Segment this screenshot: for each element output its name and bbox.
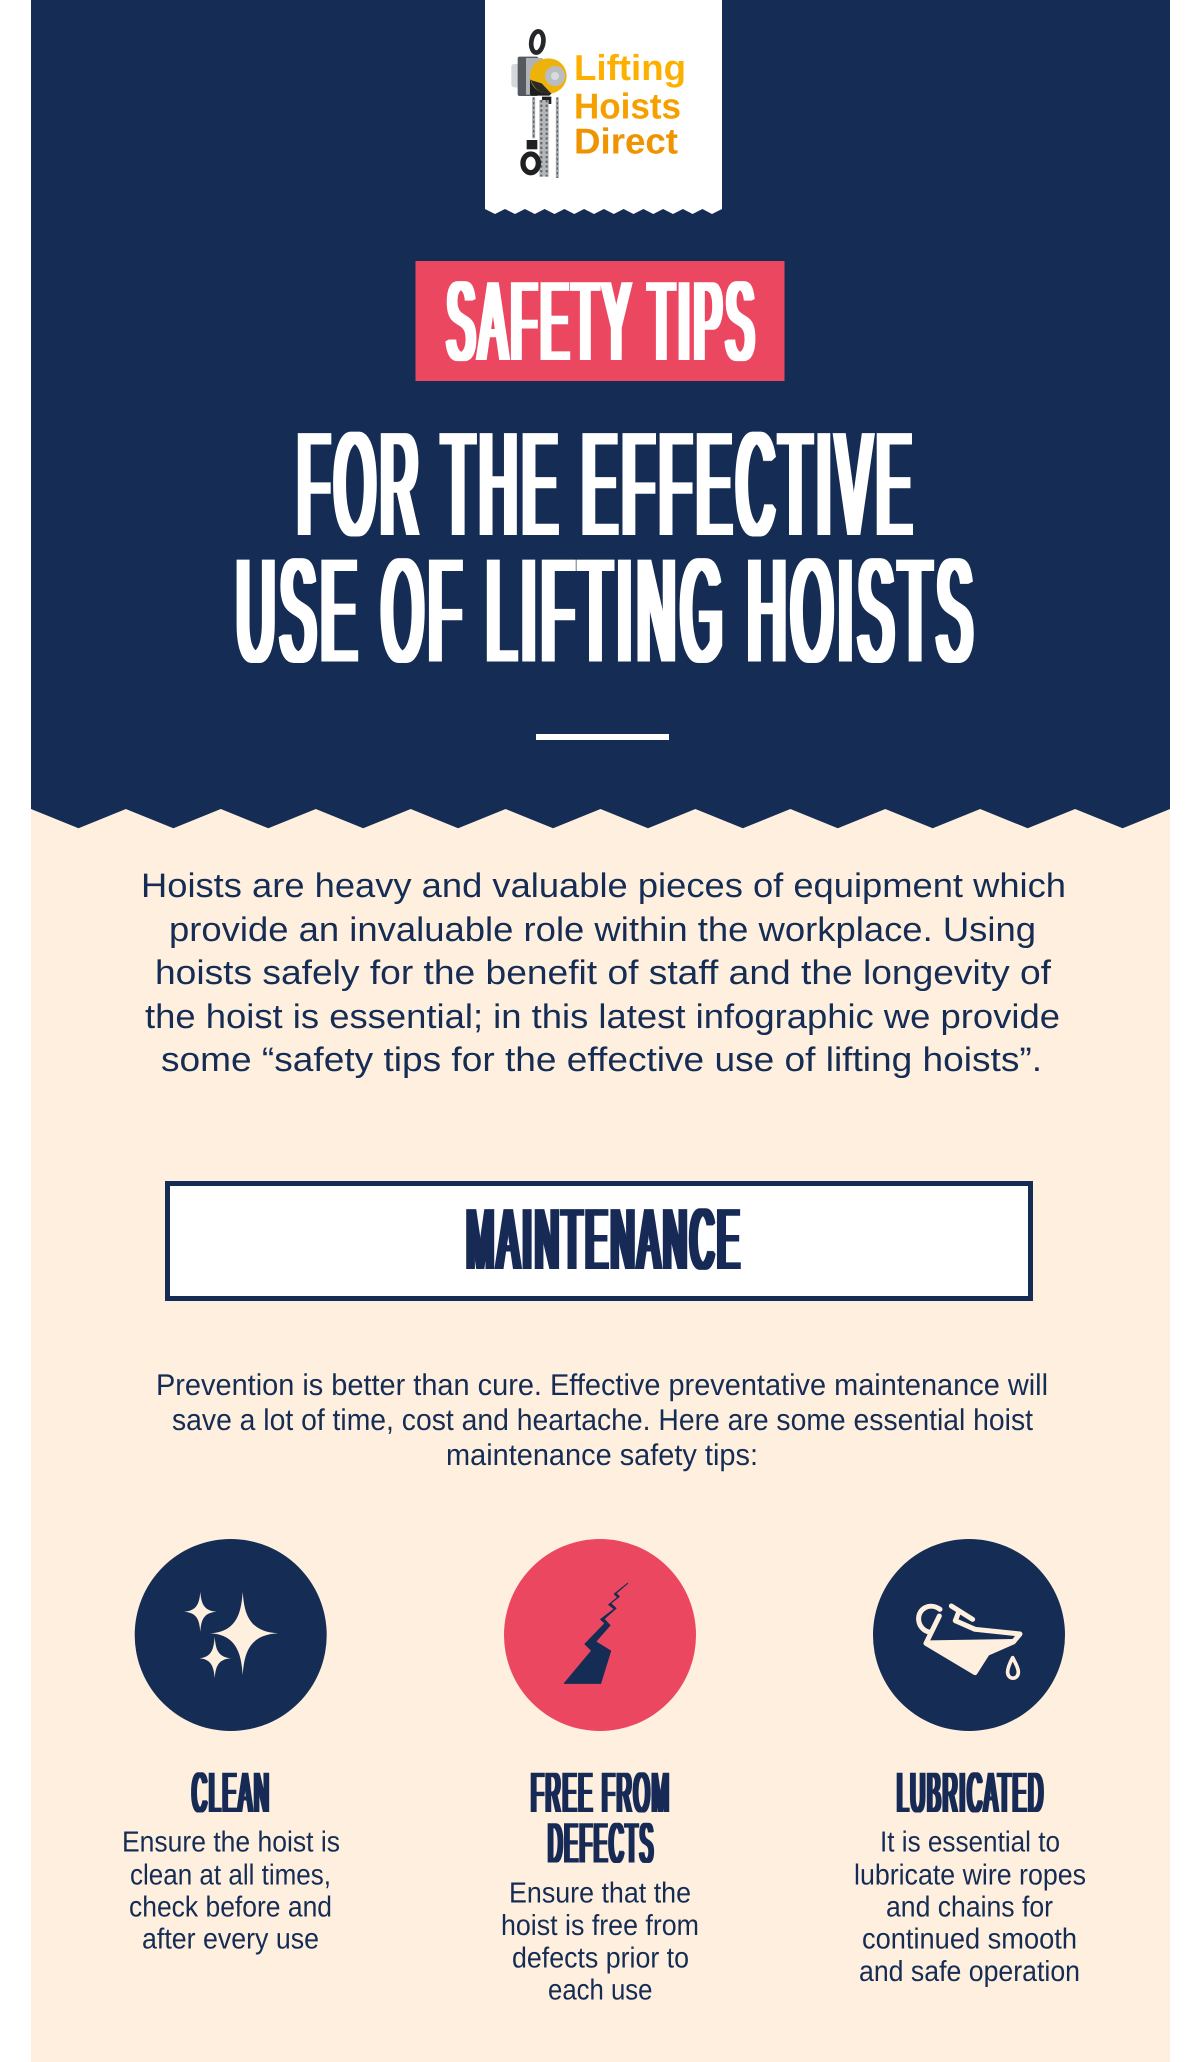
- safety tips badge: [416, 258, 784, 384]
- tip: free from defects: [501, 1539, 699, 2006]
- infographic: DEFECTS: [548, 1812, 655, 1876]
- heading: free from defects: [531, 1761, 671, 1876]
- description: clean: [122, 1827, 340, 1956]
- description: free from defects: each use: [548, 1974, 652, 2006]
- maintenance heading box: [168, 1184, 1030, 1298]
- description: lubricated: and safe operation: [859, 1956, 1080, 1988]
- logo tag background: [485, 0, 722, 214]
- logo wordmark: Hoists: [574, 86, 681, 126]
- description: clean: after every use: [142, 1924, 319, 1956]
- tip: clean: CLEAN: [192, 1761, 271, 1825]
- icon: sparkles: [135, 1539, 327, 1731]
- infographic: FREE FROM: [531, 1761, 671, 1825]
- icon: chain hoist: [511, 31, 567, 178]
- logo tag: [485, 0, 722, 214]
- maintenance intro text: [156, 1369, 1048, 1472]
- intro text: Hoists are heavy and valuable pieces of equipment which: [141, 867, 1066, 905]
- maintenance heading box: MAINTENANCE: [466, 1191, 742, 1288]
- header panel: [31, 0, 1170, 828]
- description: free from defects: defects prior to: [512, 1942, 689, 1974]
- title: [236, 402, 978, 694]
- description: free from defects: Ensure that the: [509, 1877, 691, 1909]
- chains: [534, 97, 557, 178]
- description: free from defects: hoist is free from: [501, 1910, 699, 1942]
- description: clean: check before and: [129, 1892, 332, 1924]
- intro text: hoists safely for the benefit of staff and the longevity of: [155, 954, 1052, 992]
- white divider: [536, 734, 669, 740]
- logo wordmark: Lifting: [574, 47, 686, 88]
- navy zigzag background: [31, 0, 1170, 828]
- description: clean: clean at all times,: [130, 1859, 331, 1891]
- description: lubricated: and chains for: [886, 1892, 1053, 1924]
- logo wordmark: [574, 47, 686, 162]
- description: lubricated: lubricate wire ropes: [854, 1859, 1086, 1891]
- maintenance intro text: save a lot of time, cost and heartache. Here are some essential hoist: [172, 1404, 1034, 1437]
- tip: clean: [122, 1539, 340, 1956]
- intro text: provide an invaluable role within the workplace. Using: [169, 911, 1036, 949]
- maintenance intro text: maintenance safety tips:: [446, 1439, 758, 1472]
- description: lubricated: It is essential to: [880, 1827, 1060, 1859]
- icon: crack: [504, 1539, 696, 1731]
- description: lubricated: [854, 1827, 1086, 1988]
- intro text: the hoist is essential; in this latest infographic we provide: [145, 998, 1060, 1036]
- description: lubricated: continued smooth: [862, 1924, 1077, 1956]
- description: clean: Ensure the hoist is: [122, 1827, 340, 1859]
- intro text: some “safety tips for the effective use of lifting hoists”.: [161, 1041, 1042, 1079]
- logo wordmark: Direct: [574, 120, 678, 162]
- description: free from defects: [501, 1877, 699, 2006]
- maintenance intro text: Prevention is better than cure. Effective preventative maintenance will: [156, 1369, 1048, 1402]
- icon: oil can: [873, 1539, 1065, 1731]
- tip: lubricated: [854, 1539, 1086, 1988]
- intro text: [141, 867, 1066, 1079]
